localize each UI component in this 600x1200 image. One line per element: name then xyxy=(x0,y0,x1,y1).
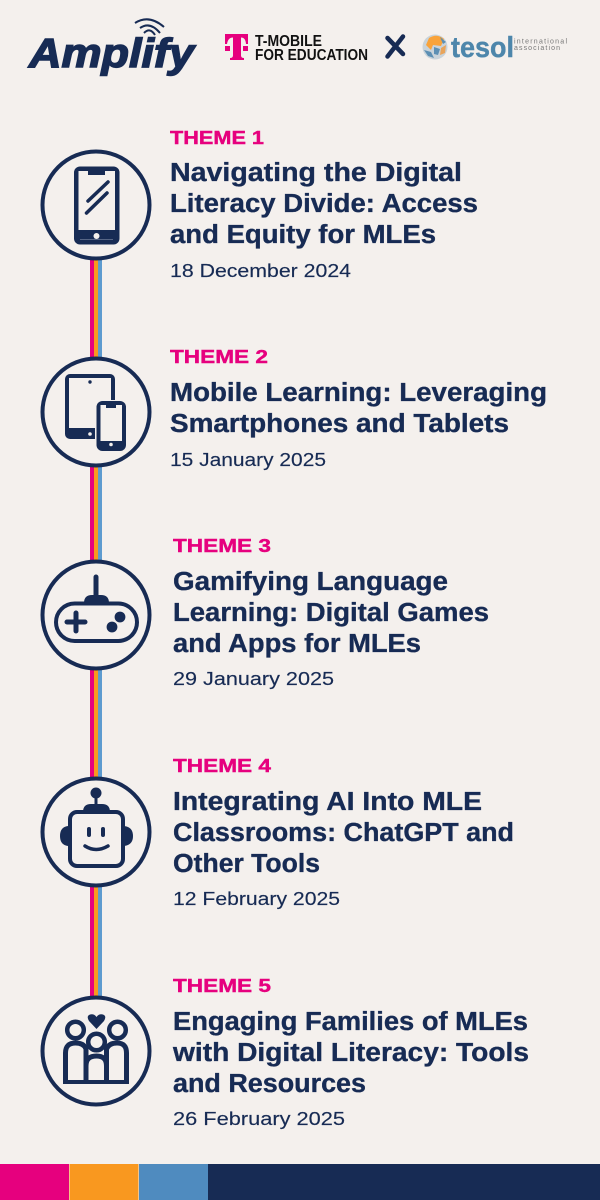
text: theme 5: with Digital Literacy: Tools xyxy=(172,1039,529,1067)
text: theme 3: and Apps for MLEs xyxy=(173,630,421,658)
text: theme 5 xyxy=(172,976,529,1129)
text: theme 2: Smartphones and Tablets xyxy=(170,410,509,438)
text: theme 2: 15 January 2025 xyxy=(170,450,326,470)
text: theme 1: Navigating the Digital xyxy=(170,159,462,187)
text: theme 4: THEME 4 xyxy=(173,756,271,776)
text: theme 3: Gamifying Language xyxy=(173,568,448,596)
logo: T-Mobile for Education: T-MOBILE xyxy=(255,33,322,50)
text: theme 2: Mobile Learning: Leveraging xyxy=(170,379,547,407)
icon: robot xyxy=(42,778,150,886)
text: theme 1: 18 December 2024 xyxy=(170,261,351,281)
icon: tablet and phone xyxy=(42,358,150,466)
text: theme 4: Other Tools xyxy=(173,850,320,878)
text: theme 1: THEME 1 xyxy=(170,128,264,148)
timeline connector 4 xyxy=(90,885,102,998)
text: theme 4: Integrating AI Into MLE xyxy=(173,788,482,816)
text: theme 3: 29 January 2025 xyxy=(173,669,334,689)
header logos xyxy=(28,19,567,76)
text: theme 3: THEME 3 xyxy=(173,536,271,556)
logo: TESOL International Association: association xyxy=(514,45,560,52)
text: theme 5: Engaging Families of MLEs xyxy=(173,1008,528,1036)
text: theme 5: THEME 5 xyxy=(173,976,271,996)
text: theme 2 xyxy=(170,347,547,470)
logo: TESOL International Association: tesol xyxy=(451,32,514,64)
logo: TESOL International Association: international xyxy=(514,38,567,46)
text: theme 1: Literacy Divide: Access xyxy=(170,190,478,218)
icon: family xyxy=(42,998,150,1104)
text: theme 3: Learning: Digital Games xyxy=(173,599,489,627)
logo: Amplify: Amplify xyxy=(28,30,196,76)
timeline connector 1 xyxy=(90,258,102,359)
icon: game controller xyxy=(42,562,150,668)
text: theme 4: Classrooms: ChatGPT and xyxy=(173,819,514,847)
footer color bar xyxy=(0,1164,600,1200)
text: theme 4: 12 February 2025 xyxy=(173,889,340,909)
text: theme 4 xyxy=(173,756,514,909)
timeline connector 3 xyxy=(90,668,102,779)
text: theme 2: THEME 2 xyxy=(170,347,268,367)
timeline connector 2 xyxy=(90,465,102,562)
icon: smartphone xyxy=(42,152,150,258)
text: theme 1: and Equity for MLEs xyxy=(170,221,436,249)
logo: T-Mobile for Education: FOR EDUCATION xyxy=(255,47,368,64)
text: theme 5: and Resources xyxy=(173,1070,366,1098)
text: theme 5: 26 February 2025 xyxy=(173,1109,345,1129)
text: theme 3 xyxy=(173,536,489,689)
logo: T-Mobile for Education xyxy=(225,33,368,64)
logo: TESOL International Association xyxy=(422,32,567,64)
icon: times mark xyxy=(388,36,403,56)
text: theme 1 xyxy=(170,128,478,281)
